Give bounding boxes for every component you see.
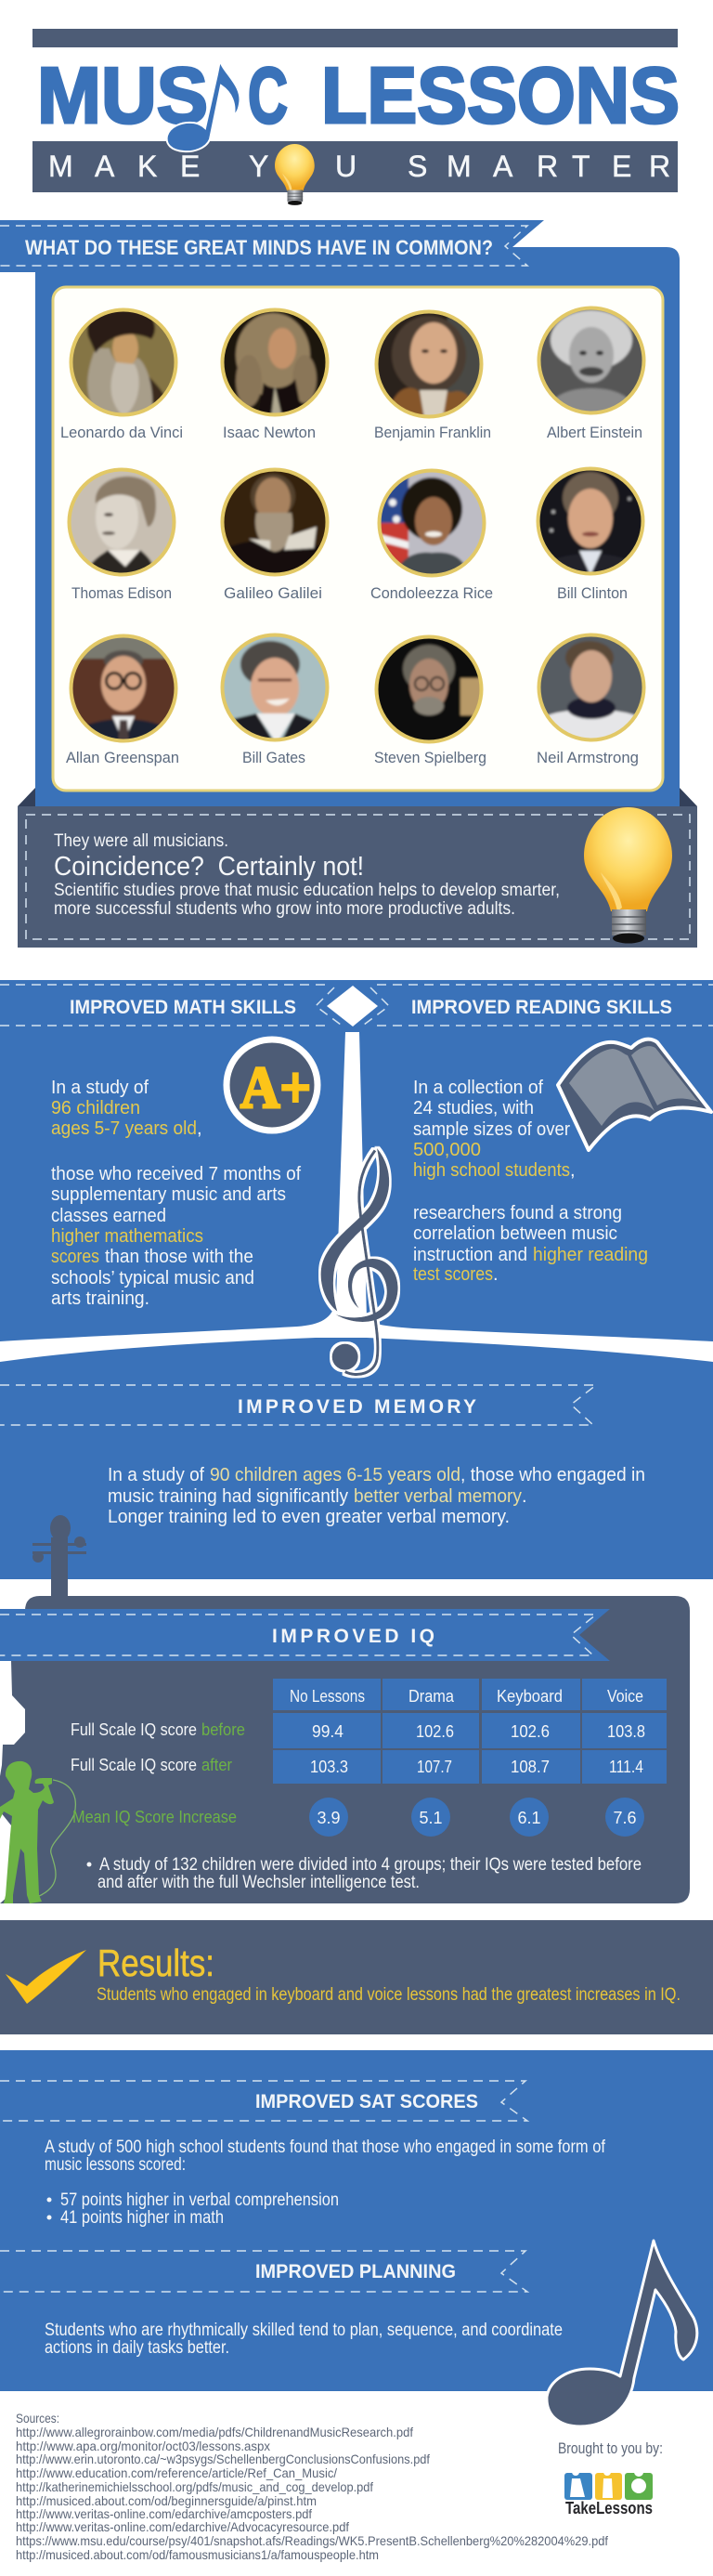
panel: they were all musicians [18, 806, 697, 948]
portrait: Bill Clinton [535, 465, 646, 577]
text block: planning: Students who are rhythmically skilled tend to plan, sequence, and coordinate [45, 2321, 563, 2340]
text block: SAT study: A study of 500 high school students found that those who engaged in some form of [45, 2138, 606, 2157]
logo: TakeLessons [564, 2467, 653, 2517]
IQ table: 99.4 [312, 1722, 344, 1741]
label: Galileo Galilei: Galileo Galilei [224, 584, 322, 602]
text block: memory study: Longer training led to even greater verbal memory. [108, 1507, 510, 1527]
portrait: Condoleezza Rice [376, 467, 487, 579]
portrait: Bill Gates [219, 632, 331, 743]
portrait: Neil Armstrong [536, 632, 647, 743]
table row labels [71, 1720, 245, 1826]
sources: http://www.erin.utoronto.ca/~w3psygs/SchellenbergConclusionsConfusions.pdf [16, 2452, 430, 2466]
ribbon heading: IMPROVED IQ [272, 1626, 434, 1647]
heading: reading: IMPROVED READING SKILLS [411, 997, 672, 1018]
subtitle: Y [249, 150, 268, 183]
ribbon heading [0, 220, 544, 272]
label: Neil Armstrong: Neil Armstrong [537, 749, 639, 766]
icon: A+ badge: A+ [240, 1054, 311, 1120]
icon: open book [558, 1040, 711, 1150]
text block: planning [45, 2321, 563, 2358]
header [32, 29, 680, 205]
table row labels: after [201, 1756, 232, 1774]
IQ table [273, 1679, 667, 1784]
panel: great minds [0, 220, 697, 806]
icon: violin neck [32, 1515, 86, 1598]
label: Thomas Edison: Thomas Edison [71, 584, 172, 602]
text block: math study: scores [51, 1247, 99, 1267]
IQ table: 102.6 [416, 1722, 454, 1741]
logo: TakeLessons: TakeLessons [565, 2499, 653, 2517]
text block: math study: ages 5-7 years old [51, 1118, 197, 1139]
text block: Scientific studies prove that music education helps to develop smarter, [54, 881, 560, 900]
music stand swoosh and stem [0, 1032, 713, 1362]
label: Albert Einstein: Albert Einstein [547, 424, 642, 441]
mean increase circles: 6.1 [517, 1809, 541, 1827]
text block: reading study: . [493, 1264, 499, 1285]
text block: reading study: In a collection of [413, 1078, 543, 1098]
text block: memory study [108, 1465, 645, 1527]
label: Allan Greenspan: Allan Greenspan [66, 749, 179, 766]
subtitle: MAKE [48, 150, 200, 183]
label: Condoleezza Rice: Condoleezza Rice [370, 584, 493, 602]
blue panel [35, 247, 680, 806]
text block: SAT study: 57 points higher in verbal comprehension [60, 2190, 339, 2210]
label: Bill Gates: Bill Gates [242, 749, 305, 766]
mean increase circles: 7.6 [613, 1809, 637, 1827]
portrait: Allan Greenspan [68, 633, 179, 744]
text block: memory study: , those who engaged in [460, 1465, 645, 1485]
text block: reading study: correlation between music [413, 1223, 617, 1244]
icon: music note in title [167, 60, 240, 151]
heading ribbon: improved memory: IMPROVED MEMORY [238, 1396, 476, 1418]
text block: SAT study [45, 2138, 606, 2228]
bullet text: and after with the full Wechsler intelligence test. [97, 1873, 420, 1892]
table row labels: before [201, 1720, 245, 1739]
text block: math study: schools’ typical music and [51, 1268, 254, 1288]
panel: improved IQ [0, 1515, 690, 1903]
results heading: Results: [97, 1942, 214, 1984]
panel: results [0, 1920, 713, 2034]
table row labels: Full Scale IQ score [71, 1720, 197, 1739]
text block: math study: supplementary music and arts [51, 1184, 286, 1205]
sources: http://musiced.about.com/od/famousmusicians1/a/famouspeople.htm [16, 2547, 379, 2562]
icon: large light bulb [584, 807, 672, 944]
portrait: Isaac Newton [219, 307, 331, 418]
heading ribbon: improved memory [0, 1385, 596, 1425]
violin body cut-out [0, 1661, 25, 1903]
text block: memory study: 90 children ages 6-15 years old [210, 1465, 460, 1485]
IQ table: 102.6 [511, 1722, 550, 1741]
table row labels: Mean IQ Score Increase [72, 1808, 237, 1826]
IQ table: Drama [408, 1687, 455, 1706]
text block: math study: higher mathematics [51, 1226, 203, 1247]
text block: math study [51, 1078, 301, 1309]
text block: reading study: sample sizes of over [413, 1119, 570, 1140]
bullet text: A study of 132 children were divided into 4 groups; their IQs were tested before [99, 1855, 642, 1875]
IQ table: Voice [607, 1687, 643, 1706]
text block: reading study: 500,000 [413, 1140, 481, 1160]
icon: treble clef [321, 1148, 398, 1375]
text block: memory study: In a study of [108, 1465, 204, 1485]
sources [16, 2411, 608, 2562]
text block: math study: 96 children [51, 1098, 140, 1118]
ribbon heading [0, 1609, 610, 1661]
title: C [248, 52, 288, 140]
label: Benjamin Franklin: Benjamin Franklin [374, 424, 491, 441]
subtitle band [32, 141, 678, 192]
text block: math study: classes earned [51, 1206, 166, 1226]
mean increase circles: 5.1 [419, 1809, 443, 1827]
text block: reading study: , [570, 1160, 576, 1181]
portrait: Benjamin Franklin [373, 308, 485, 420]
skills headings [0, 985, 713, 1026]
IQ table: No Lessons [290, 1687, 365, 1706]
heading: math: IMPROVED MATH SKILLS [70, 997, 296, 1018]
icon: check mark [6, 1950, 86, 2004]
sources: http://katherinemichielsschool.org/pdfs/music_and_cog_develop.pdf [16, 2479, 373, 2494]
inner white card [53, 287, 663, 791]
text block: reading study: high school students [413, 1160, 570, 1181]
text block: reading study: higher reading [533, 1245, 648, 1265]
top bar [32, 29, 678, 47]
text block [54, 831, 560, 919]
title [37, 52, 680, 140]
sources: http://www.veritas-online.com/edarchive/Advocacyresource.pdf [16, 2519, 349, 2534]
text block: reading study: 24 studies, with [413, 1098, 534, 1118]
heading ribbon: planning: IMPROVED PLANNING [255, 2261, 456, 2282]
heading ribbon: SAT scores: IMPROVED SAT SCORES [255, 2091, 478, 2112]
sources: http://www.education.com/reference/article/Ref_Can_Music/ [16, 2465, 337, 2480]
portrait: Galileo Galilei [219, 466, 331, 578]
sources: https://www.msu.edu/course/psy/401/snapshot.afs/Readings/WK5.PresentB.Schellenberg%20%282004%29.pdf [16, 2533, 608, 2548]
label: Leonardo da Vinci: Leonardo da Vinci [60, 424, 183, 441]
panel: blue skills section [0, 980, 713, 1579]
subtitle [48, 150, 670, 183]
mean increase circles: 3.9 [317, 1809, 341, 1827]
fold triangles [18, 788, 697, 806]
brought to you by: Brought to you by: [558, 2439, 663, 2457]
subtitle: U [335, 150, 356, 183]
sources: Sources: [16, 2411, 59, 2426]
text block: reading study: researchers found a strong [413, 1203, 622, 1223]
text block: SAT study: music lessons scored: [45, 2155, 186, 2175]
text block: memory study: . [522, 1486, 527, 1507]
title: MUS [37, 52, 208, 140]
text block: They were all musicians. [54, 831, 228, 851]
portrait: Steven Spielberg [373, 634, 485, 745]
table row labels: Full Scale IQ score [71, 1756, 197, 1774]
icon: A+ badge [227, 1040, 318, 1131]
portrait: Albert Einstein [536, 305, 647, 416]
icon: green singer [0, 1761, 75, 1903]
IQ table: 107.7 [417, 1758, 452, 1776]
sources: http://www.veritas-online.com/edarchive/amcposters.pdf [16, 2506, 312, 2521]
IQ table: 111.4 [609, 1758, 643, 1776]
text block: math study: In a study of [51, 1078, 149, 1098]
label: Isaac Newton: Isaac Newton [223, 424, 316, 441]
IQ table: Keyboard [497, 1687, 563, 1706]
text block: reading study: test scores [413, 1264, 493, 1285]
label: Bill Clinton: Bill Clinton [557, 584, 628, 602]
icon: light bulb in subtitle [275, 144, 315, 205]
text block: memory study: music training had significantly [108, 1486, 348, 1507]
mean increase circles [309, 1798, 644, 1837]
text block: planning: actions in daily tasks better. [45, 2338, 229, 2358]
IQ table: 103.8 [607, 1722, 645, 1741]
heading ribbon: planning [0, 2251, 527, 2292]
text block: more successful students who grow into more productive adults. [54, 899, 515, 919]
heading ribbon: SAT scores [0, 2081, 527, 2121]
IQ table: 103.3 [310, 1758, 348, 1776]
text block: memory study: better verbal memory [354, 1486, 522, 1507]
title: LESSONS [321, 52, 680, 140]
text block: math study: , [197, 1118, 202, 1139]
text block: math study: than those with the [105, 1247, 253, 1267]
text block: SAT study: 41 points higher in math [60, 2208, 224, 2228]
sources: http://www.allegrorainbow.com/media/pdfs/ChildrenandMusicResearch.pdf [16, 2425, 413, 2439]
text block: reading study [413, 1078, 648, 1285]
ribbon heading: WHAT DO THESE GREAT MINDS HAVE IN COMMON? [25, 236, 493, 259]
sources: http://musiced.about.com/od/beginnersguide/a/pinst.htm [16, 2493, 317, 2508]
portrait: Leonardo da Vinci [68, 307, 179, 418]
text block: reading study: instruction and [413, 1245, 527, 1265]
icon: large music note [547, 2241, 697, 2426]
panel: SAT and planning [0, 2050, 713, 2391]
text block: Coincidence? Certainly not! [54, 852, 364, 882]
label: Steven Spielberg: Steven Spielberg [374, 749, 486, 766]
subtitle: SMARTER [408, 150, 670, 183]
bullet text [87, 1855, 642, 1892]
icon: diamond [327, 986, 378, 1026]
text block: math study: those who received 7 months of [51, 1164, 301, 1184]
IQ table: 108.7 [511, 1758, 550, 1776]
text block: math study: arts training. [51, 1288, 149, 1309]
sources: http://www.apa.org/monitor/oct03/lessons.aspx [16, 2439, 270, 2453]
portrait: Thomas Edison [66, 466, 177, 578]
